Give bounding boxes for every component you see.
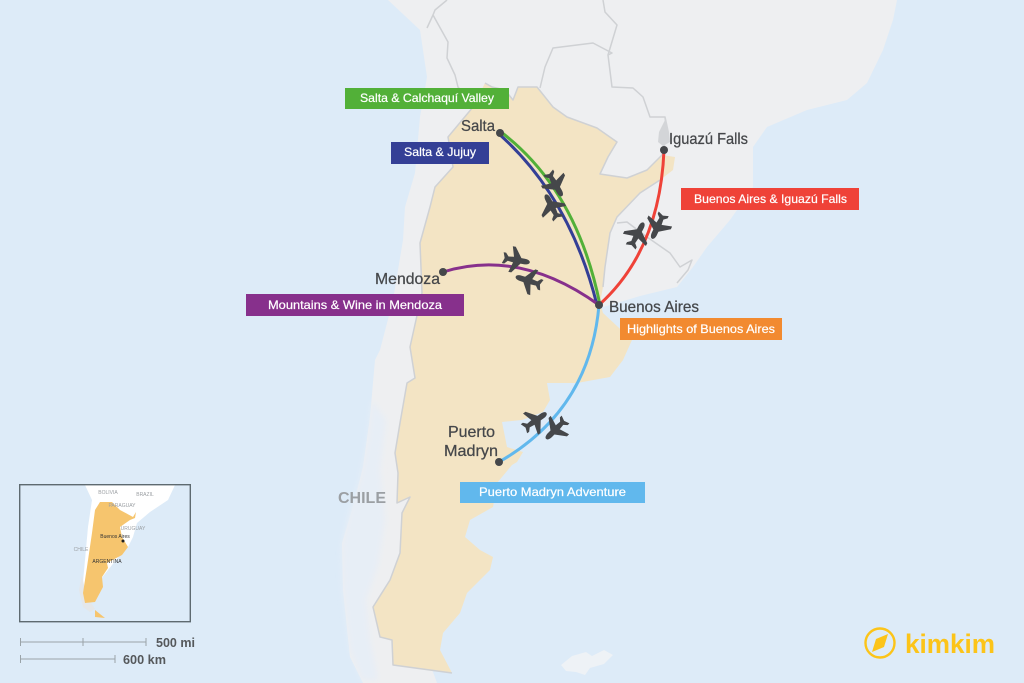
kimkim logo: kimkim [905,629,995,659]
plane 7 [516,402,554,439]
inset labels: PARAGUAY [108,503,136,509]
inset labels: Buenos Aires [100,534,130,540]
tag: Salta and Calchaqui Valley: Salta & Calchaquí Valley [360,91,494,105]
inset labels: URUGUAY [121,526,146,532]
city labels: Mendoza [375,271,440,288]
tag: Buenos Aires and Iguazu Falls [681,188,859,210]
inset labels: BOLIVIA [98,490,118,496]
tag: Salta and Jujuy: Salta & Jujuy [404,145,476,159]
tag: Buenos Aires and Iguazu Falls: Buenos Aires & Iguazú Falls [694,192,847,206]
inset locator map [20,485,190,622]
inset labels: CHILE [74,547,89,553]
city labels: Puerto [448,424,495,441]
kimkim logo [866,628,995,659]
southern Chile island fringe [342,400,386,680]
city labels: Salta [461,118,495,135]
route lines [443,132,664,462]
neighbouring land [342,0,897,683]
route: Puerto Madryn [499,305,599,462]
inset labels [74,490,154,565]
route: Iguazu Falls [599,150,664,305]
inset islands [79,575,95,612]
Argentina [373,83,675,673]
tag: Mountains and Wine: Mountains & Wine in Mendoza [268,298,442,312]
route: Salta and Jujuy [499,134,597,305]
country borders [373,0,692,673]
tag: Highlights of Buenos Aires [620,318,782,340]
tag: Salta and Calchaqui Valley [345,88,509,109]
plane 8 [537,410,575,448]
plane 1 [537,166,573,203]
plane icons [500,166,675,448]
inset labels: ARGENTINA [92,559,122,565]
city labels: Buenos Aires [609,299,699,316]
inset frame [20,485,190,622]
Falkland Islands [561,650,613,675]
city labels [375,118,748,460]
tag: Highlights of Buenos Aires: Highlights of Buenos Aires [627,322,775,336]
city labels: Iguazú Falls [669,131,748,148]
plane 3 [500,245,532,275]
country label: Chile: CHILE [338,490,386,507]
tag: Puerto Madryn Adventure [460,482,645,503]
scale label kilometres: 600 km [123,652,166,667]
plane 2 [534,189,570,225]
scale label miles: 500 mi [156,635,195,650]
route: Mendoza [443,265,599,305]
plane 4 [512,264,546,298]
tag: Mountains and Wine [246,294,464,316]
scale bars [20,635,195,667]
inset capital dot [122,540,124,542]
city dots [439,129,668,466]
route: Salta and Calchaqui Valley [501,132,600,305]
tag: Salta and Jujuy [391,142,489,164]
Iguazu waterfall area [658,118,670,146]
inset labels: BRAZIL [136,492,154,498]
city labels: Madryn [444,443,498,460]
tag: Puerto Madryn Adventure: Puerto Madryn Adventure [479,485,626,499]
plane 6 [640,208,675,244]
plane 5 [619,217,655,253]
